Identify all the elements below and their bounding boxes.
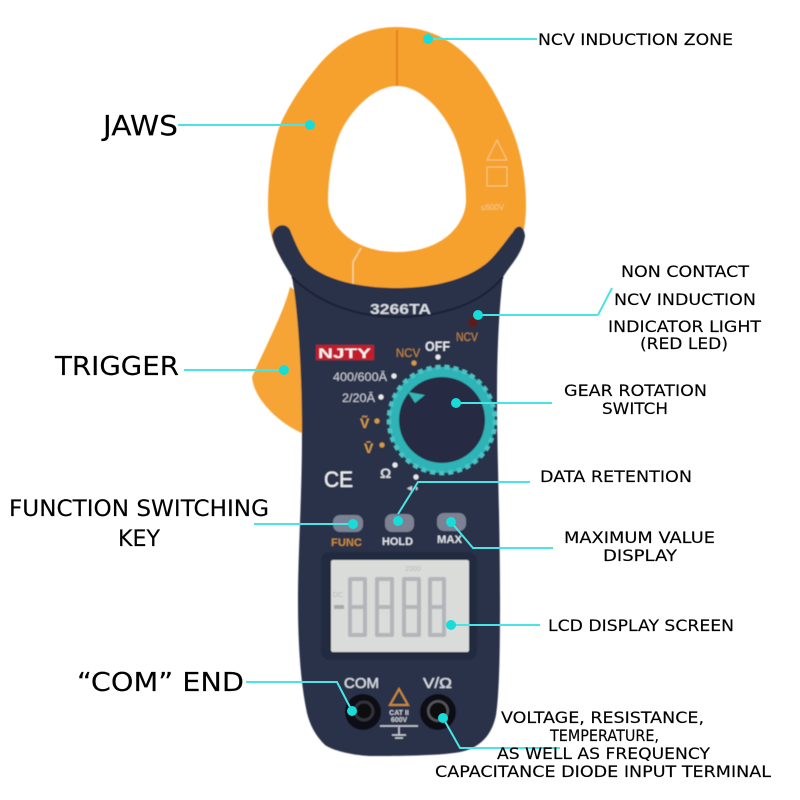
icon: clamp meter device: ≤600V: [481, 203, 505, 212]
dial labels: NCV: [456, 332, 478, 344]
label: function switching key: FUNCTION SWITCHING: [9, 497, 269, 522]
terminals: V/Ω: [423, 675, 452, 692]
CE mark: CE: [324, 467, 353, 492]
model number: 3266TA: [370, 301, 431, 318]
terminals: CAT II: [389, 710, 409, 717]
label: input terminal: [435, 708, 771, 781]
buttons: [331, 513, 466, 549]
label: data retention: DATA RETENTION: [540, 467, 692, 486]
label: gear rotation switch: [564, 381, 707, 418]
callout dots: [279, 34, 483, 723]
label: input terminal: AS WELL AS FREQUENCY: [497, 744, 710, 763]
label: trigger: TRIGGER: [54, 352, 179, 382]
label: function switching key: [9, 497, 269, 552]
dial labels: ◄◗: [405, 483, 419, 493]
dial labels: Ṽ: [360, 414, 370, 431]
dial labels: NCV: [396, 348, 420, 360]
dial labels: OFF: [425, 338, 450, 354]
trigger: [252, 287, 310, 434]
label: non contact NCV induction indicator light: NCV INDUCTION: [614, 290, 756, 309]
buttons: HOLD: [382, 536, 413, 548]
icon: clamp meter device: [252, 27, 526, 756]
callout lines: [178, 39, 612, 748]
terminals: 600V: [391, 717, 407, 724]
label: LCD display screen: LCD DISPLAY SCREEN: [548, 616, 734, 635]
label: input terminal: TEMPERATURE,: [549, 726, 659, 745]
LCD screen: [321, 552, 477, 660]
label: jaws: JAWS: [101, 109, 178, 142]
label: non contact NCV induction indicator light: (RED LED): [640, 334, 728, 353]
dial labels: [333, 332, 478, 493]
meter body: [272, 225, 525, 756]
label: non contact NCV induction indicator light: [608, 262, 761, 353]
label: input terminal: CAPACITANCE DIODE INPUT TERMINAL: [435, 762, 771, 781]
terminals: [344, 675, 456, 738]
label: non contact NCV induction indicator light: NON CONTACT: [621, 262, 749, 281]
label: gear rotation switch: SWITCH: [602, 399, 668, 418]
LCD screen: 2000: [405, 566, 421, 573]
dial labels: 400/600Ā: [333, 370, 387, 384]
jaws: [268, 27, 526, 300]
label: maximum value display: MAXIMUM VALUE: [564, 528, 715, 547]
buttons: FUNC: [331, 537, 362, 549]
dial labels: V̄: [364, 439, 374, 456]
buttons: MAX: [437, 534, 463, 546]
label: function switching key: KEY: [118, 527, 161, 552]
label: NCV induction zone: NCV INDUCTION ZONE: [538, 30, 733, 49]
LCD screen: DC: [333, 592, 343, 599]
label: gear rotation switch: GEAR ROTATION: [564, 381, 707, 400]
terminals: COM: [344, 675, 379, 692]
label: COM end: “COM” END: [77, 668, 244, 698]
rotary switch: [389, 367, 495, 473]
label: non contact NCV induction indicator light: INDICATOR LIGHT: [608, 317, 761, 336]
brand badge: [316, 345, 374, 361]
label: input terminal: VOLTAGE, RESISTANCE,: [501, 708, 704, 727]
brand badge: NJTY: [318, 345, 372, 361]
dial labels: 2/20Ā: [342, 391, 375, 405]
label: maximum value display: [564, 528, 715, 565]
dial labels: Ω: [380, 465, 391, 481]
label: maximum value display: DISPLAY: [603, 546, 677, 565]
